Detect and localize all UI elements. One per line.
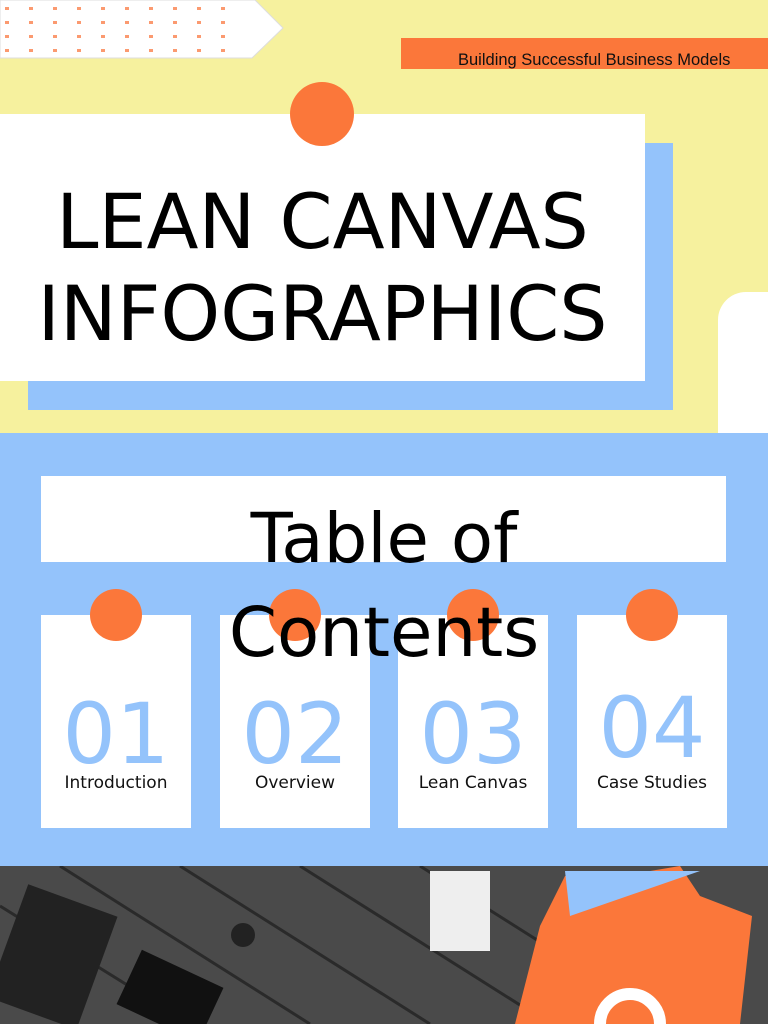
- title box: [0, 114, 645, 381]
- right white shape: [718, 292, 768, 437]
- title pin: [290, 82, 354, 146]
- TOC heading: [229, 499, 539, 673]
- orange tag: [515, 866, 752, 1024]
- card 1: [41, 615, 191, 828]
- card 4: Case Studies: [597, 773, 707, 793]
- title box: INFOGRAPHICS: [37, 269, 608, 358]
- TOC heading: Contents: [229, 593, 539, 673]
- card 2: 02: [242, 685, 348, 783]
- TOC heading: Table of: [251, 499, 517, 579]
- title shadow: [28, 143, 673, 410]
- card pins: [90, 589, 678, 641]
- blue TOC panel: [0, 433, 768, 866]
- card 2: [220, 615, 370, 828]
- card 3: [398, 615, 548, 828]
- subtitle banner: Building Successful Business Models: [458, 51, 730, 69]
- card 1: Introduction: [65, 773, 167, 793]
- card 1: 01: [63, 685, 169, 783]
- card 2: Overview: [255, 773, 335, 793]
- card 3: 03: [420, 685, 526, 783]
- title box: LEAN CANVAS: [56, 177, 589, 266]
- card 3: Lean Canvas: [419, 773, 527, 793]
- dotted arrow banner: [0, 0, 284, 58]
- card 4: 04: [599, 679, 705, 777]
- subtitle banner: [401, 38, 768, 69]
- photo: [0, 866, 768, 1024]
- card 4: [577, 615, 727, 828]
- TOC header bar: [41, 476, 726, 562]
